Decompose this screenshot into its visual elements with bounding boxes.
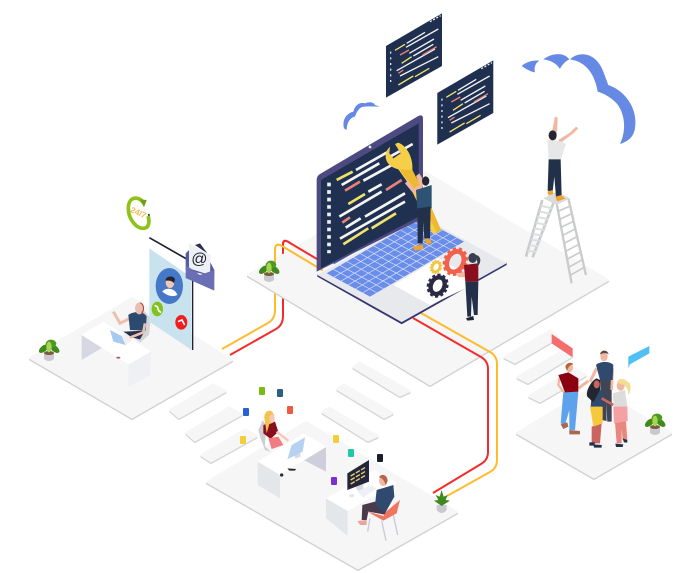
icon: dark gear <box>425 272 451 300</box>
desk surfaces <box>82 335 128 364</box>
laptop <box>317 115 507 324</box>
speech bubble: red <box>552 334 573 357</box>
person: man holding wrench <box>386 143 441 251</box>
icon: email envelope <box>186 243 214 291</box>
person: support agent with headset <box>113 302 147 339</box>
icon: small cloud <box>343 102 380 130</box>
platform: team platform <box>517 387 671 479</box>
icon: yellow gear <box>428 259 444 275</box>
desk: developer desk with man <box>326 460 400 541</box>
icon: 24/7 ring <box>128 198 149 229</box>
connector: upper lines running to the laptop <box>275 241 322 270</box>
desk: reception desk with woman <box>258 411 327 498</box>
icon: 24/7 ring: 24/7 <box>129 204 148 221</box>
plant: main platform <box>257 261 281 282</box>
person: man on ladder <box>547 117 578 201</box>
code window: lower <box>437 60 493 145</box>
laptop on desk <box>110 330 132 345</box>
icon: email envelope: @ <box>191 251 207 268</box>
small app icons <box>240 387 383 485</box>
phone <box>149 238 193 350</box>
icon: answer call <box>152 302 163 316</box>
stepping strips <box>171 331 585 462</box>
platform: support desk platform <box>30 298 232 419</box>
team group <box>552 334 649 448</box>
chair <box>135 310 151 343</box>
trackpad area <box>393 258 480 305</box>
person: woman with yellow skirt <box>587 378 613 448</box>
keyboard <box>327 218 464 297</box>
person: developer <box>357 475 394 525</box>
platform: office platform <box>207 422 457 570</box>
connector: lower lines from laptop to office <box>413 313 497 496</box>
screen hinge strip <box>333 220 408 263</box>
laptop base <box>317 217 507 324</box>
chair legs <box>368 515 398 541</box>
plant: office platform <box>434 490 450 513</box>
person: blonde woman <box>613 379 631 447</box>
speech bubble: blue <box>628 346 649 368</box>
code window: upper <box>386 13 442 98</box>
person: woman holding gear <box>425 245 480 321</box>
person: woman at monitor <box>263 411 288 449</box>
laptop screen <box>317 115 423 272</box>
plant: team platform <box>643 414 667 435</box>
monitor <box>287 437 305 459</box>
icon: wrench <box>386 143 441 234</box>
icon: large cloud <box>522 54 635 144</box>
platform: main laptop platform <box>248 172 608 386</box>
chair <box>367 500 400 521</box>
ladder <box>526 192 586 283</box>
keyboard and mouse <box>349 485 377 497</box>
icon: orange gear <box>440 245 471 278</box>
icon: hang up call <box>175 315 187 330</box>
plant: support platform <box>37 340 61 361</box>
person: man in grey trousers <box>590 351 613 422</box>
chair <box>258 420 271 452</box>
monitor with code <box>347 460 369 491</box>
connector: upper-left red and yellow lines <box>222 241 290 355</box>
avatar <box>156 268 183 304</box>
person: man in red shirt <box>558 363 588 434</box>
desk: support desk <box>82 302 151 387</box>
